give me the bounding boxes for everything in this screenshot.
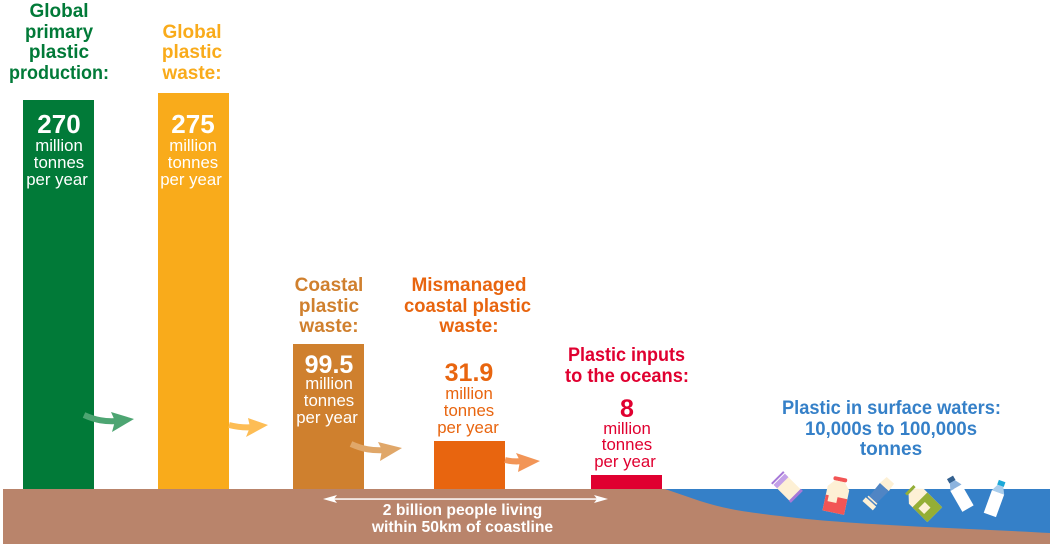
value: plastic inputs to the oceans: per year: [594, 452, 656, 471]
heading: mismanaged coastal plastic waste: Mismanaged: [411, 275, 527, 296]
bar: global primary plastic production: tonnes: [34, 153, 84, 172]
value: mismanaged coastal plastic waste: per year: [437, 418, 499, 437]
heading: coastal plastic waste: waste:: [298, 316, 359, 337]
label: 2 billion people: 2 billion people living: [383, 502, 542, 519]
arrow: waste to coastal: [229, 418, 268, 437]
arrow: production to waste: [84, 412, 134, 432]
value: mismanaged coastal plastic waste: tonnes: [444, 401, 494, 420]
bar: global primary plastic production: 270: [37, 109, 81, 139]
icon: purple jar: [771, 471, 803, 503]
heading: mismanaged coastal plastic waste: waste:: [438, 316, 499, 337]
bar: global plastic waste: [158, 93, 229, 489]
bar: global plastic waste: million: [169, 136, 217, 155]
heading: coastal plastic waste: plastic: [299, 296, 360, 317]
icon: green bottle: [902, 482, 942, 522]
heading: coastal plastic waste: [295, 275, 363, 337]
heading: plastic in surface waters: [782, 398, 1001, 460]
arrow: coastline span: [323, 495, 608, 503]
heading: global primary plastic production: primary: [25, 22, 93, 43]
bar: coastal plastic waste: million: [305, 374, 353, 393]
heading: mismanaged coastal plastic waste: coastal plastic: [404, 296, 531, 317]
heading: global primary plastic production: Global: [29, 1, 89, 22]
value: mismanaged coastal plastic waste: [437, 359, 499, 437]
heading: global primary plastic production: plastic: [29, 42, 90, 63]
label: 2 billion people: within 50km of coastline: [371, 519, 553, 536]
bar: global plastic waste: per year: [160, 170, 222, 189]
bar: global primary plastic production: million: [35, 136, 83, 155]
icon: water bottle cyan cap: [984, 479, 1008, 517]
bar: global plastic waste: tonnes: [168, 153, 218, 172]
bar: coastal plastic waste: tonnes: [304, 391, 354, 410]
bar: global plastic waste: 275: [171, 109, 215, 139]
bar: coastal plastic waste: per year: [296, 408, 358, 427]
heading: global primary plastic production: production:: [9, 63, 109, 84]
bar: mismanaged coastal plastic waste: [434, 441, 505, 489]
ground: [3, 489, 1050, 544]
heading: mismanaged coastal plastic waste: [404, 275, 531, 337]
label: 2 billion people: [371, 502, 553, 536]
value: plastic inputs to the oceans: million: [603, 419, 651, 438]
heading: plastic in surface waters: tonnes: [860, 439, 922, 460]
heading: global primary plastic production: [9, 1, 109, 84]
heading: plastic inputs to the oceans: to the oceans:: [565, 366, 689, 387]
water: [665, 489, 1050, 533]
icon: red bottle: [822, 475, 852, 515]
value: plastic inputs to the oceans: 8: [620, 395, 634, 423]
arrow: coastal to mismanaged: [351, 442, 402, 461]
heading: plastic in surface waters: 10,000s to 100,000s: [805, 419, 977, 440]
value: mismanaged coastal plastic waste: million: [445, 384, 493, 403]
heading: coastal plastic waste: Coastal: [295, 275, 363, 296]
value: plastic inputs to the oceans: tonnes: [602, 435, 652, 454]
icon: blue tube: [862, 476, 896, 510]
bar: plastic inputs to the oceans: [591, 475, 662, 489]
bar: coastal plastic waste: [293, 344, 364, 489]
arrow: mismanaged to inputs: [505, 453, 540, 472]
heading: plastic inputs to the oceans: [565, 345, 689, 387]
heading: global plastic waste: Global: [162, 22, 222, 43]
bar: global primary plastic production: per year: [26, 170, 88, 189]
icon: water bottle dark cap: [944, 474, 974, 512]
bar: global primary plastic production: [23, 100, 94, 489]
heading: global plastic waste: waste:: [161, 63, 222, 84]
bar: coastal plastic waste: 99.5: [305, 351, 353, 379]
heading: plastic in surface waters: Plastic in surface waters:: [782, 398, 1001, 419]
value: plastic inputs to the oceans: [594, 395, 656, 471]
value: mismanaged coastal plastic waste: 31.9: [445, 359, 493, 387]
heading: global plastic waste: [161, 22, 223, 84]
heading: global plastic waste: plastic: [162, 42, 223, 63]
heading: plastic inputs to the oceans: Plastic inputs: [568, 345, 685, 366]
